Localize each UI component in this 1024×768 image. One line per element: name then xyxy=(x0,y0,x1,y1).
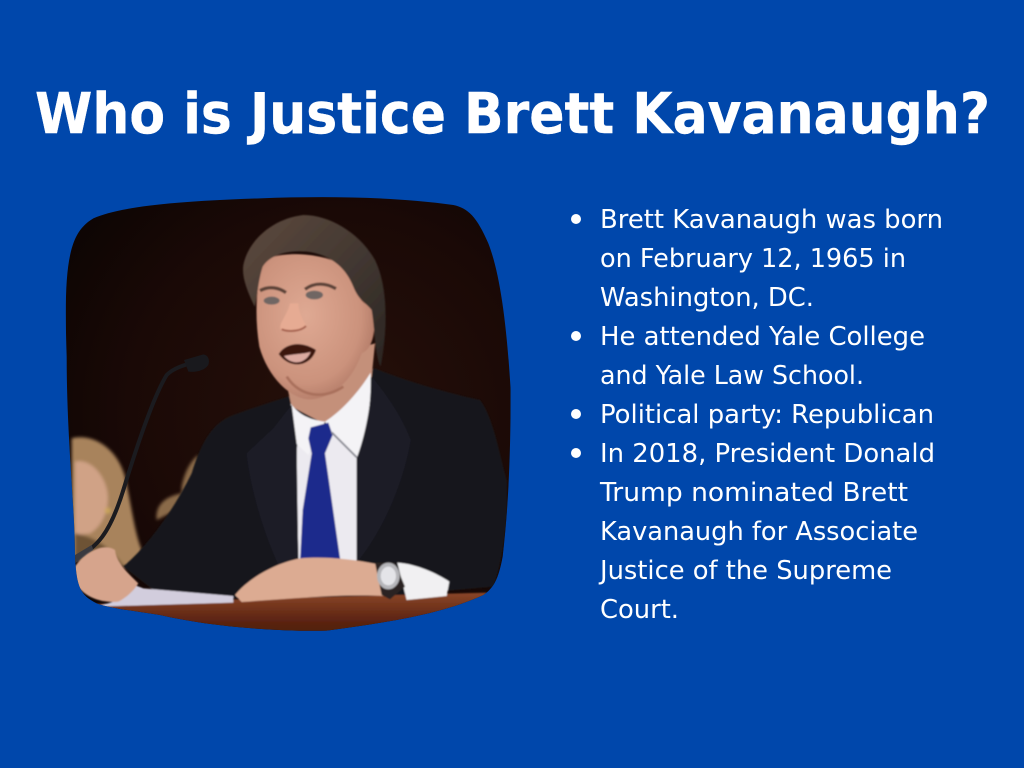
bullet: nomination: In 2018, President Donald xyxy=(600,438,935,468)
nose xyxy=(280,303,306,331)
shirt cuff xyxy=(397,563,449,600)
neck xyxy=(283,343,375,423)
bullet: birth: Brett Kavanaugh was born xyxy=(600,204,943,234)
women seated at left xyxy=(72,437,200,567)
bullet list xyxy=(571,204,943,624)
tie xyxy=(300,423,341,563)
table xyxy=(60,593,487,637)
bullet: birth: on February 12, 1965 in xyxy=(600,243,906,273)
bullet: education: He attended Yale College xyxy=(600,321,925,351)
papers xyxy=(100,585,235,608)
photo: Brett Kavanaugh testifying xyxy=(60,190,520,637)
bullet: nomination: Kavanaugh for Associate xyxy=(600,516,918,546)
bullet: education: and Yale Law School. xyxy=(600,360,864,390)
lapels xyxy=(247,377,411,565)
body, blurred group xyxy=(60,215,507,637)
bullet: nomination: Court. xyxy=(600,594,679,624)
bullet: nomination: Justice of the Supreme xyxy=(598,555,892,585)
eyes xyxy=(260,284,336,305)
right hand xyxy=(235,558,385,602)
suit jacket xyxy=(123,368,507,598)
left hand xyxy=(75,547,138,602)
mouth xyxy=(279,344,316,364)
bullet: nomination xyxy=(571,438,935,624)
wristwatch xyxy=(375,563,405,599)
bullet: birth: Washington, DC. xyxy=(600,282,814,312)
face xyxy=(256,254,374,399)
photo background xyxy=(60,190,520,635)
collar xyxy=(291,373,371,458)
shirt xyxy=(297,425,357,563)
hair xyxy=(243,215,386,367)
bullet: education xyxy=(571,321,925,390)
microphone xyxy=(75,354,209,563)
bullet: nomination: Trump nominated Brett xyxy=(599,477,908,507)
chin shading xyxy=(287,377,343,395)
collar shadow xyxy=(332,432,357,457)
bullet: political party: Political party: Republican xyxy=(600,399,934,429)
bullet: birth xyxy=(571,204,943,312)
